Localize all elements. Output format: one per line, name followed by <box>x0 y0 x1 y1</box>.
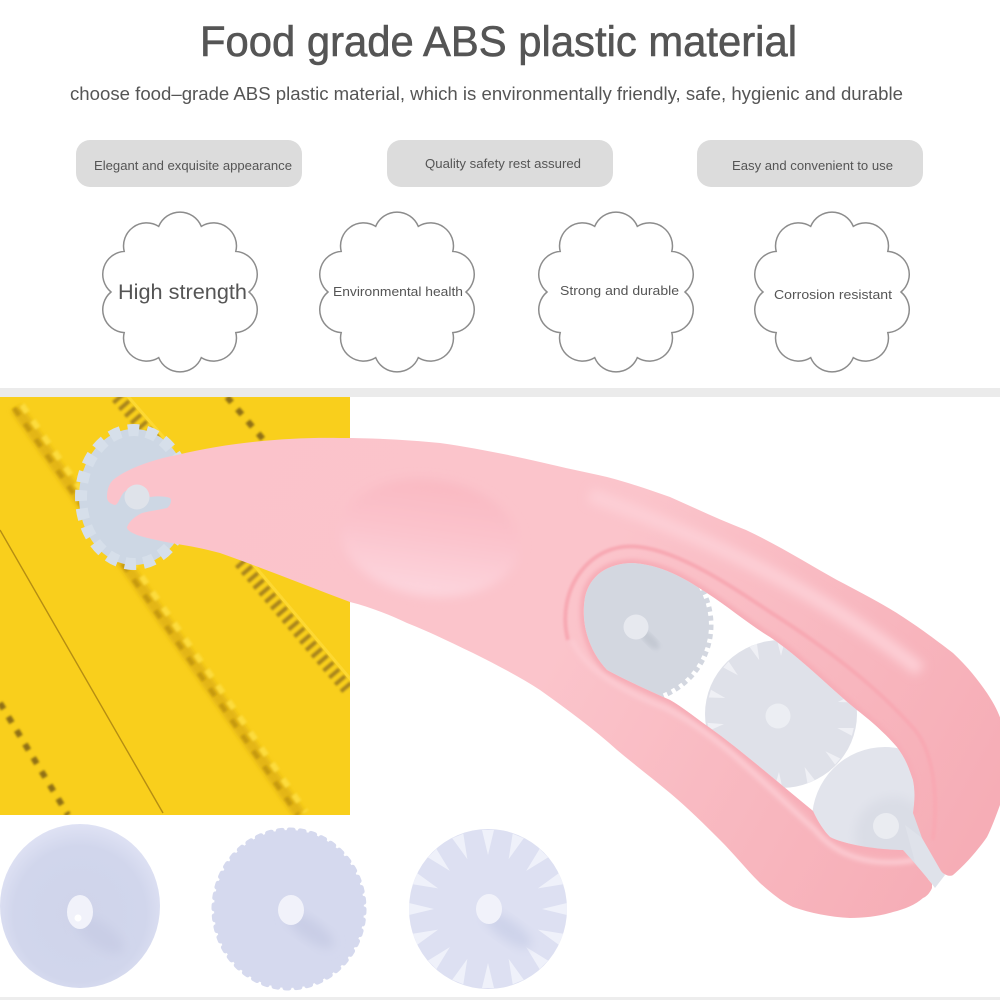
wheel: fluted <box>705 640 857 788</box>
tip cutting wheel <box>79 429 189 565</box>
flower badge: environmental health <box>320 212 474 372</box>
pill: quality safety: Quality safety rest assured <box>425 156 581 171</box>
wheels inside handle window <box>584 563 945 888</box>
divider band <box>0 388 1000 397</box>
flower badge: environmental health: Environmental health <box>333 284 463 299</box>
flower badge: high strength <box>103 212 257 372</box>
flower badge: high strength: High strength <box>118 280 247 304</box>
flower badge: corrosion resistant: Corrosion resistant <box>774 287 892 302</box>
window recess rim <box>565 495 935 862</box>
bottom band <box>0 997 1000 1000</box>
disc: fluted wheel <box>409 829 567 989</box>
disc: plain wheel <box>0 824 160 988</box>
title: Food grade ABS plastic material <box>200 19 797 66</box>
yellow dough photo <box>0 393 358 815</box>
wheel: scalloped <box>584 563 714 698</box>
subtitle: choose food–grade ABS plastic material, which is environmentally friendly, safe, hygienic and durable <box>70 83 903 104</box>
tip wheel pin <box>124 484 150 510</box>
disc: scalloped wheel <box>214 830 364 988</box>
flower badge: corrosion resistant <box>755 212 909 372</box>
pill: quality safety <box>387 140 613 187</box>
pill: easy to use: Easy and convenient to use <box>732 158 893 173</box>
pill: easy to use <box>697 140 923 187</box>
pill: elegant appearance <box>76 140 302 187</box>
pink handle <box>107 438 1000 918</box>
flower badge: strong and durable: Strong and durable <box>560 283 679 298</box>
pill: elegant appearance: Elegant and exquisite appearance <box>94 158 292 173</box>
thumb dimple <box>333 468 527 608</box>
wheel: plain <box>812 747 945 888</box>
flower badge: strong and durable <box>539 212 693 372</box>
